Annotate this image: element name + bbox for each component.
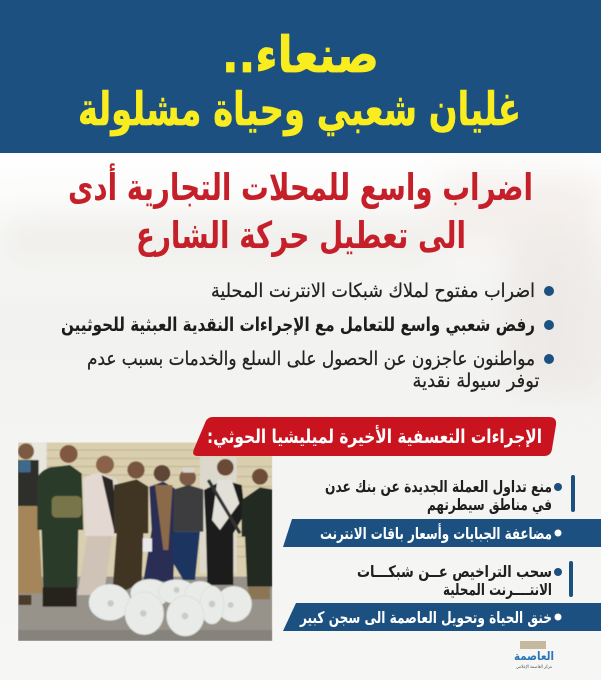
photo: men with satellite dishes: [18, 442, 272, 641]
dishes: [89, 579, 252, 636]
man 8: [242, 469, 272, 599]
man 5: [143, 465, 175, 582]
item 2: blue band fees: [283, 519, 601, 547]
man 7: [204, 459, 245, 585]
title: city: صنعاء..: [222, 26, 379, 84]
man 6: [173, 467, 203, 580]
man 2: [37, 445, 83, 607]
man 4: [113, 461, 148, 590]
item 3: licences: [357, 561, 573, 599]
bullet list: [61, 280, 554, 392]
item 4: blue band prison: [283, 603, 601, 631]
bullet 3: [87, 348, 554, 392]
item 1: currency ban: في مناطق سيطرتهم: [427, 495, 552, 515]
bullet 1: اضراب مفتوح لملاك شبكات الانترنت المحلية: [211, 280, 535, 302]
bullet 3: توفر سيولة نقدية: [412, 370, 540, 392]
red headline: الى تعطيل حركة الشارع: [136, 214, 466, 257]
logo: [514, 641, 554, 670]
header band: [0, 0, 601, 153]
item 3: licences: سحب التراخيص عــن شبكـــات: [357, 562, 552, 581]
bullet 3: مواطنون عاجزون عن الحصول على السلع والخدمات بسبب عدم: [87, 348, 535, 370]
item 1: currency ban: [325, 475, 575, 515]
man 1: [18, 443, 43, 605]
logo: العاصمة: [514, 649, 554, 663]
red headline: [68, 163, 533, 257]
item 3: licences: الانتــــرنت المحلية: [443, 580, 552, 599]
logo: مركز العاصمة الإعلامي: [516, 664, 552, 670]
red banner: [193, 417, 556, 456]
man 3: [77, 456, 119, 595]
